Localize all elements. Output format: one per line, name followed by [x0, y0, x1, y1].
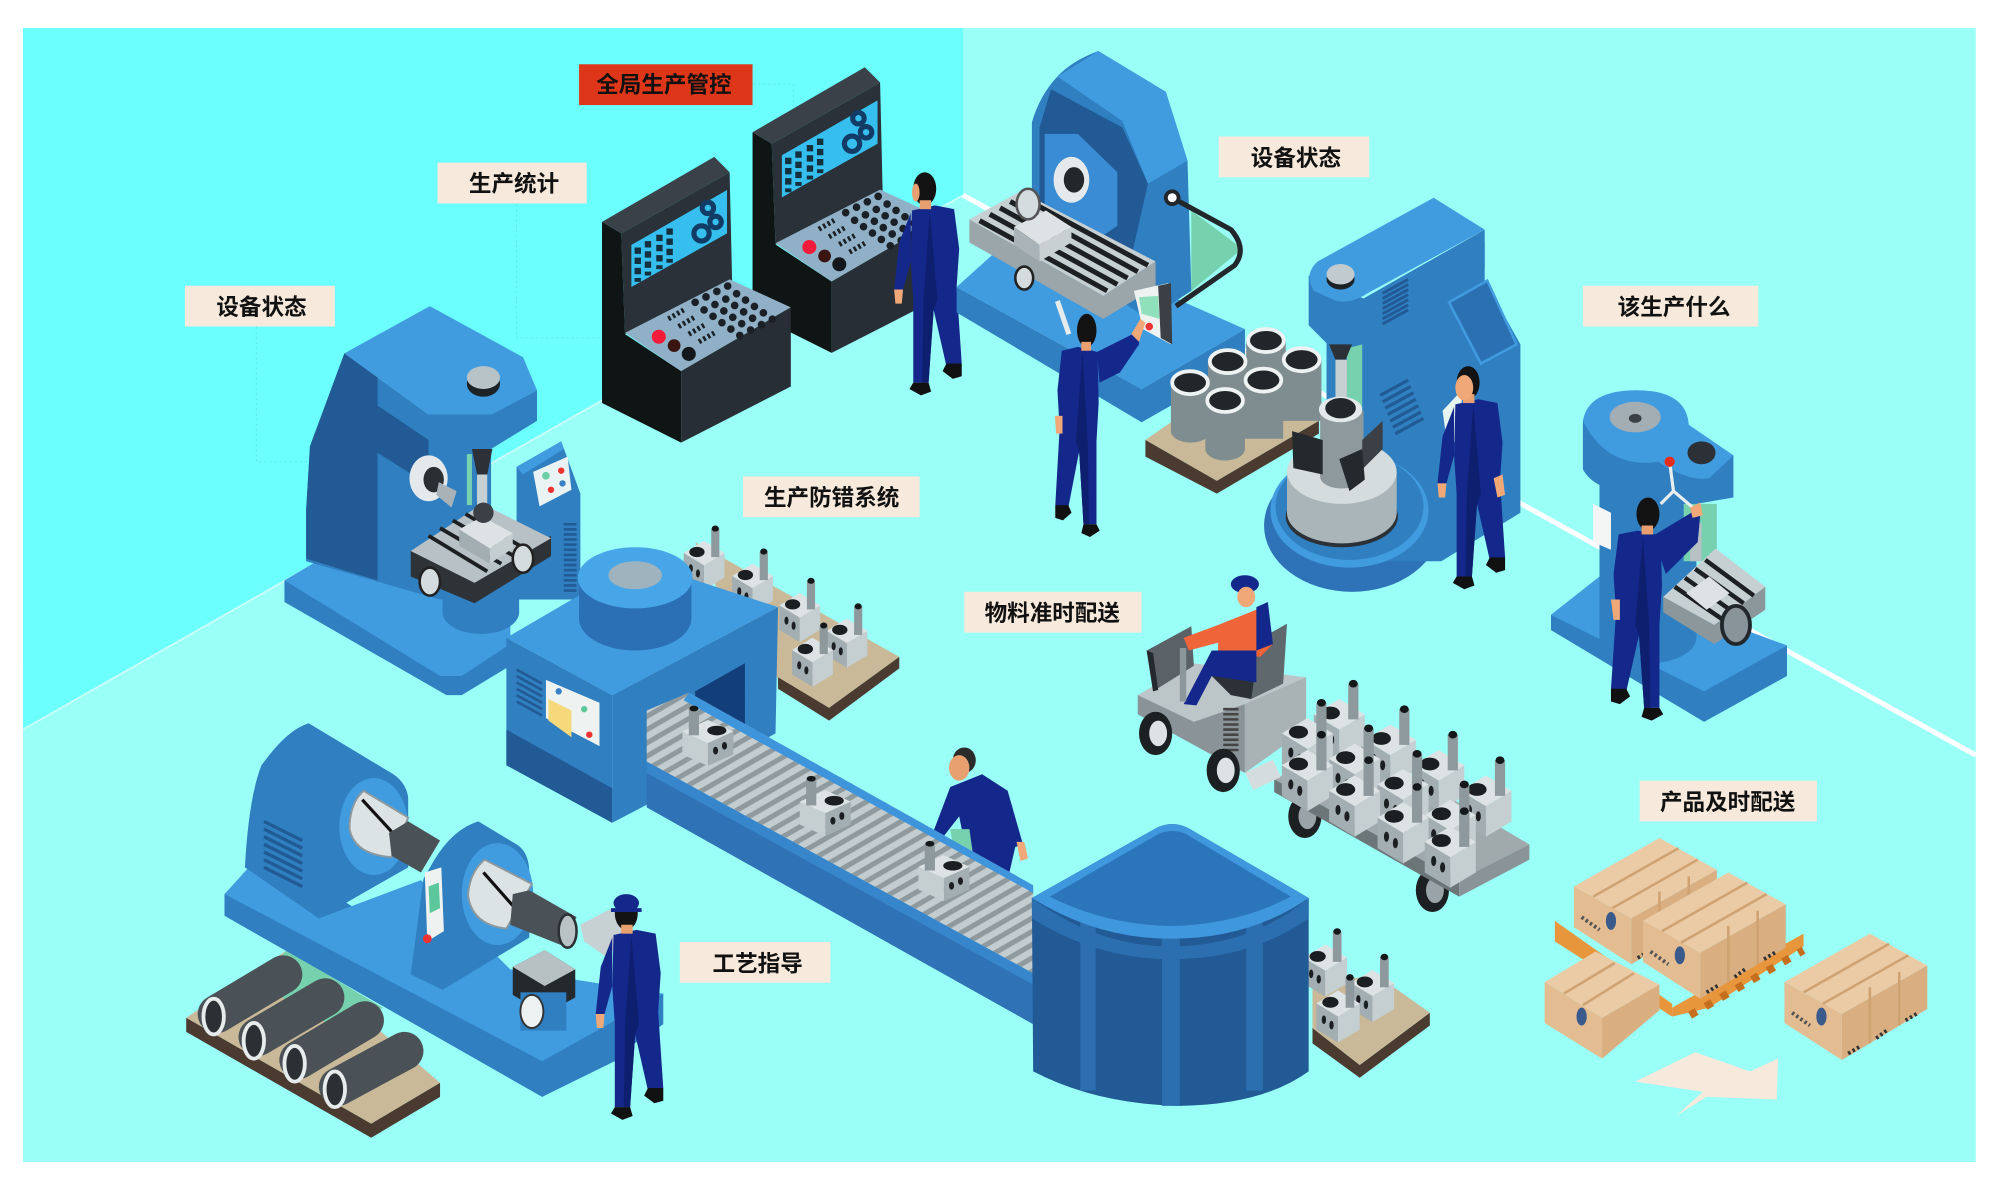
right milling machine [957, 51, 1245, 422]
label: 生产防错系统 [743, 476, 920, 517]
worker behind conveyor [931, 747, 1028, 880]
worker at console [894, 172, 962, 395]
label: 产品及时配送 [1640, 781, 1817, 821]
knob [467, 366, 500, 397]
gauge block [513, 950, 575, 1031]
left machine panel [517, 441, 580, 599]
label: 设备状态 right [1219, 136, 1369, 177]
trailer with parts [1245, 680, 1529, 912]
green hose area [1191, 210, 1242, 291]
control cabinet back [753, 67, 941, 353]
label: 物料准时配送: 物料准时配送 [985, 601, 1120, 626]
parts pallet behind conveyor head [684, 526, 899, 721]
far right table [1663, 548, 1765, 644]
lathe machine [224, 723, 663, 1097]
label: 全局生产管控 [579, 64, 753, 105]
label: 生产统计: 生产统计 [469, 171, 559, 196]
left machine table [411, 503, 551, 603]
label: 生产防错系统: 生产防错系统 [764, 486, 899, 511]
label: 工艺指导: 工艺指导 [713, 951, 803, 976]
central press machine [1264, 198, 1520, 592]
worker at drilling machine [1611, 497, 1703, 721]
chuck [1286, 397, 1398, 547]
pallet of dark bars [186, 950, 440, 1138]
floor boundary line right [963, 195, 1976, 755]
conveyor head machine [506, 547, 778, 823]
large blue storage cylinder [1032, 824, 1309, 1106]
arrow [1635, 1052, 1778, 1116]
label: 该生产什么: 该生产什么 [1618, 295, 1731, 320]
lathe operator [596, 894, 663, 1120]
seat [1251, 624, 1287, 699]
label: 该生产什么 [1583, 286, 1758, 327]
conveyor belt [647, 693, 1033, 1024]
label: 设备状态 left: 设备状态 [216, 295, 307, 320]
faint leader lines [256, 84, 793, 462]
right machine table [969, 189, 1156, 334]
right machine panel [1134, 283, 1172, 344]
part on belt [918, 841, 969, 901]
lathe control panel [423, 867, 444, 943]
floor boundary line left [23, 195, 963, 730]
left milling machine [284, 306, 580, 695]
label: 工艺指导 [680, 942, 830, 983]
label: 产品及时配送: 产品及时配送 [1660, 790, 1796, 815]
far right drilling machine [1551, 390, 1787, 722]
parts pallet bottom right [1304, 928, 1430, 1078]
label: 全局生产管控: 全局生产管控 [596, 72, 732, 97]
part on belt [800, 776, 851, 836]
cardboard boxes on pallets [1545, 838, 1927, 1060]
lever [1661, 462, 1699, 513]
worker at press [1437, 366, 1505, 589]
front left box stack [1545, 952, 1659, 1059]
press knob [1327, 264, 1355, 290]
status panel [546, 680, 599, 746]
label: 设备状态 left [185, 286, 335, 327]
control cabinet front [602, 157, 791, 443]
label: 生产统计 [438, 163, 587, 203]
worker at right milling machine [1055, 314, 1145, 537]
back wall [23, 28, 963, 730]
forklift cart with driver [1138, 575, 1306, 792]
label: 设备状态 right: 设备状态 [1251, 146, 1341, 171]
driver [1184, 575, 1273, 705]
part on belt [682, 706, 733, 766]
paper chart [1593, 504, 1611, 550]
pallet of grey tubes [1145, 329, 1321, 494]
label: 物料准时配送 [964, 592, 1142, 633]
